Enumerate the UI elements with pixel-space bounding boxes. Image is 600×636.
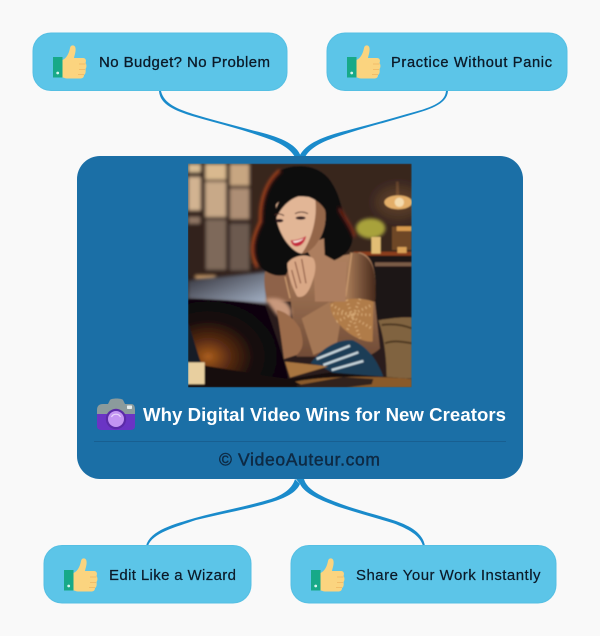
card: Edit [44, 546, 251, 603]
card: No Budget [33, 33, 287, 90]
card: Share: Share Your Work Instantly [356, 567, 541, 584]
dress lace [265, 298, 292, 322]
heading: Why Digital Video Wins for New Creators [143, 404, 506, 425]
card: No Budget: No Budget? No Problem [99, 54, 270, 71]
eyes, brows and smile [275, 212, 308, 246]
window [188, 164, 251, 280]
connector: centre to Edit [146, 479, 300, 546]
icon: camera [97, 398, 135, 430]
laptop [188, 299, 288, 379]
forearm [277, 310, 303, 359]
neck and chest [304, 238, 347, 302]
left arm [264, 272, 292, 302]
connector: Practice to centre [299, 91, 448, 157]
striped clothing [311, 340, 383, 377]
shelf, plant and vase [353, 218, 412, 319]
face [276, 196, 325, 254]
torso [290, 252, 380, 360]
sofa [378, 317, 412, 378]
connector: centre to Share [296, 479, 425, 546]
panel: centre [77, 156, 523, 479]
hair fringe [274, 194, 326, 218]
photo: woman at laptop [188, 164, 422, 387]
lamp [384, 182, 412, 209]
hair [253, 166, 353, 276]
connector: No Budget to centre [159, 91, 301, 157]
glow from laptop [188, 272, 267, 304]
card: Practice [327, 33, 567, 90]
copyright: © VideoAuteur.com [219, 450, 380, 470]
table [188, 366, 412, 387]
card: Share [291, 546, 556, 603]
hand [287, 256, 315, 297]
card: Edit: Edit Like a Wizard [109, 567, 236, 584]
card: Practice: Practice Without Panic [391, 55, 552, 71]
